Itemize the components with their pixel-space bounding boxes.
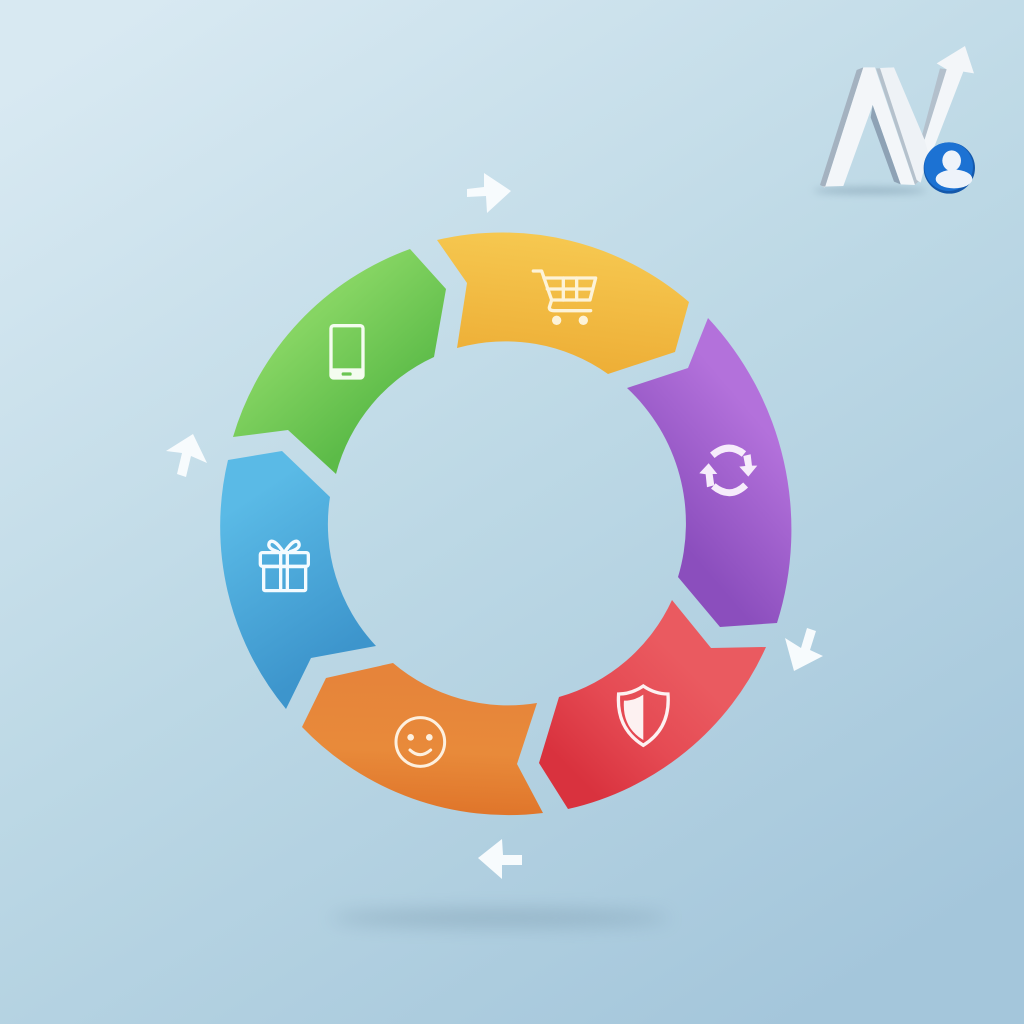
cycle ring	[220, 232, 791, 815]
direction arrow: top	[467, 173, 511, 213]
logo letter A	[820, 67, 915, 187]
logo	[813, 46, 975, 194]
direction arrow: bottom	[478, 839, 522, 879]
logo shadow	[813, 188, 927, 194]
icon: shopping cart	[533, 271, 596, 325]
ground shadow	[330, 910, 670, 926]
icon: smartphone	[331, 326, 363, 378]
segment: blue gift	[220, 451, 376, 709]
direction arrow: left	[166, 434, 207, 477]
icon: gift box	[260, 541, 308, 591]
segment: purple refresh	[627, 318, 791, 627]
segment: red shield	[539, 600, 766, 809]
logo user badge	[924, 142, 975, 194]
segment: green phone	[233, 249, 446, 474]
icon: shield	[618, 686, 668, 745]
segment: yellow cart	[437, 232, 689, 374]
logo growth arrow	[876, 46, 974, 185]
icon: smiley face	[396, 718, 445, 766]
direction arrow: right	[785, 628, 823, 671]
segment: orange smile	[302, 663, 543, 815]
icon: refresh arrows	[699, 448, 757, 493]
